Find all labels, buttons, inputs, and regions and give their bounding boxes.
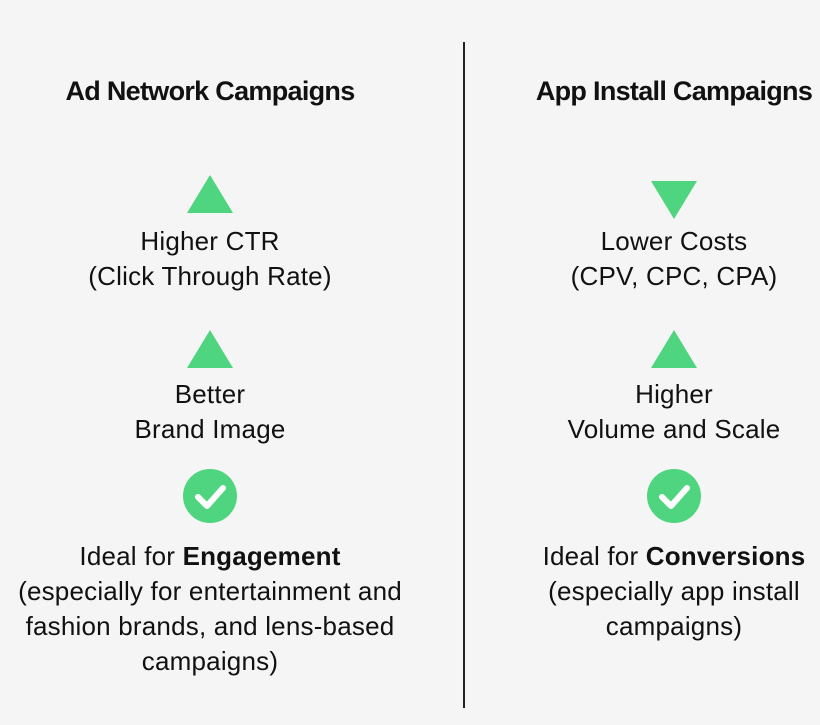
text: ideal for conversions: Ideal for Conversions bbox=[543, 541, 805, 571]
text: lower costs: (CPV, CPC, CPA) bbox=[571, 261, 777, 291]
text: lower costs: Lower Costs bbox=[601, 226, 747, 256]
heading: app install: App Install Campaigns bbox=[536, 76, 812, 106]
icon: up triangle right bbox=[651, 330, 697, 368]
icon: check right bbox=[647, 469, 701, 523]
text: better brand image: Better bbox=[175, 379, 245, 409]
text: better brand image bbox=[134, 379, 286, 444]
text: ideal for engagement: Ideal for Engagement bbox=[79, 541, 341, 571]
text: higher volume: Volume and Scale bbox=[568, 414, 780, 444]
heading: ad network: Ad Network Campaigns bbox=[65, 76, 355, 106]
icon: check left bbox=[183, 469, 237, 523]
icon: up triangle left 1 bbox=[187, 175, 233, 213]
text: better brand image: Brand Image bbox=[134, 414, 286, 444]
text: higher volume: Higher bbox=[635, 379, 713, 409]
text: higher ctr: Higher CTR bbox=[140, 226, 280, 256]
text: ideal for engagement: fashion brands, and lens-based bbox=[26, 611, 394, 641]
text: ideal for conversions: campaigns) bbox=[606, 611, 742, 641]
text: higher ctr: (Click Through Rate) bbox=[88, 261, 332, 291]
text: ideal for engagement: campaigns) bbox=[142, 646, 278, 676]
text: ideal for engagement bbox=[18, 541, 402, 676]
icon: up triangle left 2 bbox=[187, 330, 233, 368]
text: ideal for conversions: (especially app install bbox=[548, 576, 800, 606]
text: ideal for conversions bbox=[543, 541, 805, 641]
text: ideal for engagement: (especially for entertainment and bbox=[18, 576, 402, 606]
text: higher ctr bbox=[88, 226, 332, 291]
icon: down triangle right bbox=[651, 181, 697, 219]
text: lower costs bbox=[571, 226, 777, 291]
divider bbox=[463, 42, 465, 708]
text: higher volume bbox=[568, 379, 780, 444]
